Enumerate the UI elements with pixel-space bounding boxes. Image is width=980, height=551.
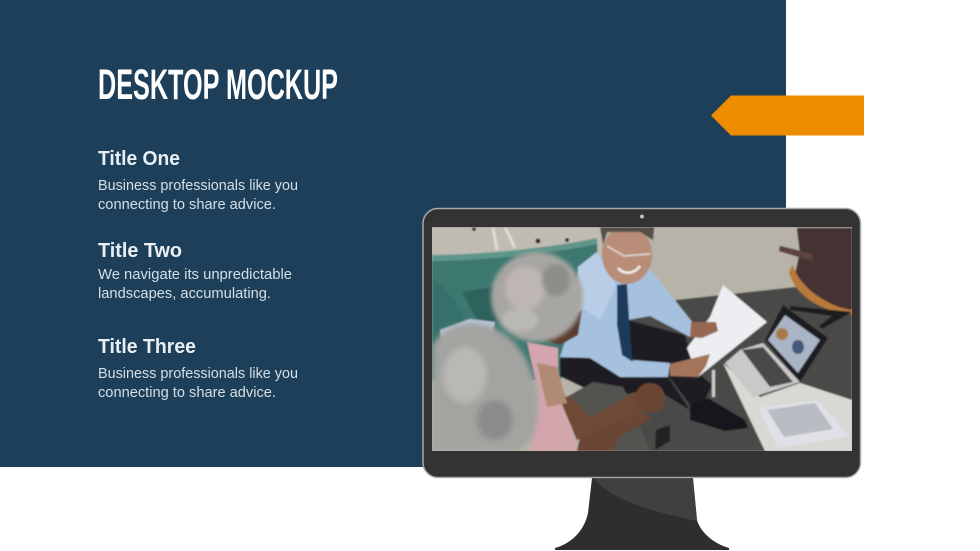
webcam: [640, 214, 644, 218]
text block: title two: [98, 240, 292, 302]
text block: title one: Business professionals like you: [98, 178, 298, 194]
text block: title one: connecting to share advice.: [98, 197, 276, 213]
text block: title three: Business professionals like you: [98, 366, 298, 382]
photo: light carpet backdrop: [432, 227, 852, 451]
man shirt: [560, 252, 693, 377]
grey trousers: [567, 382, 650, 451]
shoe: [690, 398, 748, 431]
pink shirt: [527, 342, 577, 451]
chair: [795, 228, 852, 310]
white table: [723, 363, 852, 451]
text block: title one: Title One: [98, 148, 180, 170]
text block: title two: Title Two: [98, 240, 182, 262]
teal sofa: [432, 240, 600, 380]
text block: title two: landscapes, accumulating.: [98, 286, 271, 302]
text block: title three: connecting to share advice.: [98, 385, 276, 401]
woman arm: [558, 392, 648, 440]
glasses: [607, 246, 650, 256]
title: DESKTOP MOCKUP: [98, 62, 338, 109]
shoulder white: [439, 318, 496, 340]
photo top edge line: [432, 227, 852, 228]
text block: title three: [98, 336, 298, 401]
photo: business meeting: [432, 226, 852, 451]
text block: title one: [98, 148, 298, 213]
arrow: orange tag: [711, 96, 864, 136]
monitor bezel: [423, 208, 860, 478]
table document: [758, 400, 850, 448]
paper: [687, 285, 767, 377]
man trousers: [627, 320, 712, 405]
man head: [602, 226, 652, 284]
hands: [690, 322, 718, 338]
dark floor: [612, 286, 852, 451]
text block: title three: Title Three: [98, 336, 196, 358]
monitor: [423, 208, 860, 550]
monitor stand: [555, 478, 729, 550]
text block: title two: We navigate its unpredictable: [98, 267, 292, 283]
grey hair back: [491, 252, 583, 342]
tie: [617, 284, 633, 362]
grey hair front: [432, 323, 538, 451]
man 2 neck: [540, 310, 582, 345]
panel: navy background: [0, 0, 786, 467]
laptop base: [725, 343, 800, 397]
laptop screen: [765, 305, 828, 382]
